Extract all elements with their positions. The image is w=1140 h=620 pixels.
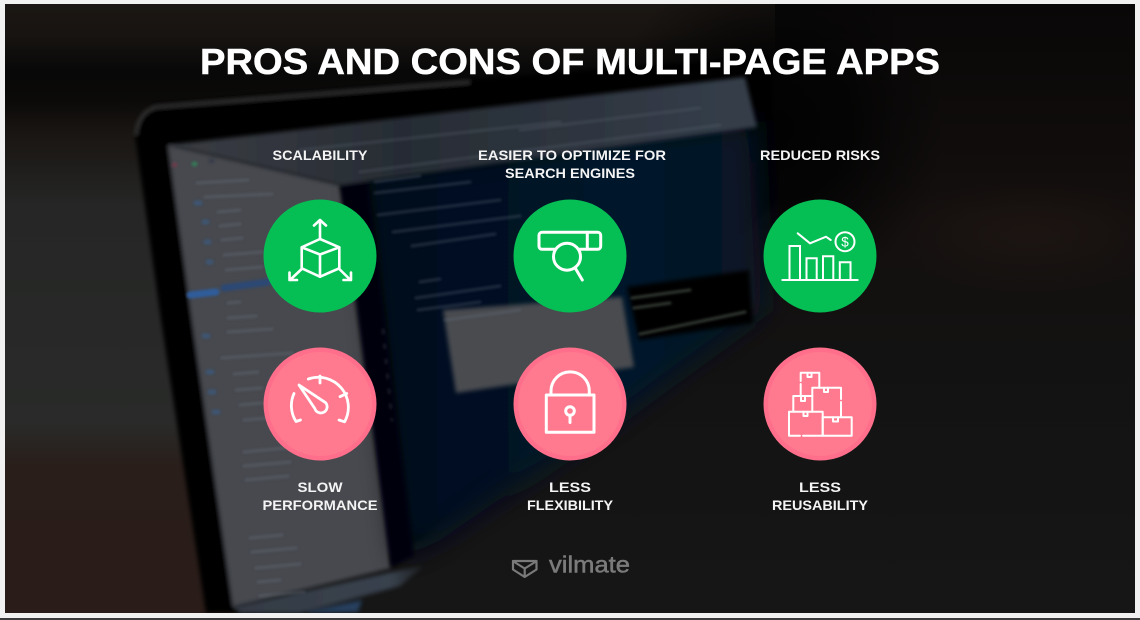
label: less flexibility: LESS [549, 479, 591, 495]
pink circle [264, 348, 376, 460]
logo: vilmate [513, 552, 630, 578]
dialog box [443, 297, 634, 393]
pink circle [764, 348, 876, 460]
label: less flexibility [527, 479, 614, 513]
label: slow performance [262, 479, 378, 513]
icon: cube with arrows [290, 220, 351, 280]
icon: vilmate shield [513, 561, 536, 577]
label: slow performance: SLOW [298, 479, 343, 495]
green circle [764, 200, 876, 312]
label: reduced risks: REDUCED RISKS [760, 147, 880, 163]
icon: padlock [546, 372, 594, 432]
label: easier to optimize: EASIER TO OPTIMIZE FOR [478, 147, 666, 163]
laptop base [233, 565, 425, 613]
column 3 con: less reusability [764, 348, 876, 513]
label: less reusability: REUSABILITY [772, 497, 869, 513]
column 1 pro: scalability [264, 147, 376, 312]
icon: bar chart with dollar coin [782, 232, 858, 280]
icon: speedometer [291, 376, 348, 422]
sidebar pane [168, 145, 391, 607]
label: easier to optimize: SEARCH ENGINES [505, 165, 635, 181]
icon: stacked boxes [789, 373, 852, 436]
label: slow performance: PERFORMANCE [262, 497, 378, 513]
green circle [264, 200, 376, 312]
editor gutter [340, 181, 414, 568]
label: easier to optimize [478, 147, 666, 181]
title: PROS AND CONS OF MULTI-PAGE APPS [200, 41, 940, 82]
label: scalability: SCALABILITY [272, 147, 368, 163]
label: less reusability: LESS [799, 479, 841, 495]
laptop bezel [134, 70, 651, 613]
label: less reusability [772, 479, 869, 513]
column 2 pro: search engines [478, 147, 666, 312]
column 3 pro: reduced risks [760, 147, 880, 312]
terminal box [627, 270, 753, 340]
icon: dollar sign: $ [841, 234, 849, 250]
icon: search bar with magnifier [539, 232, 601, 280]
pink circle [514, 348, 626, 460]
window toolbar [168, 77, 757, 185]
label: less flexibility: FLEXIBILITY [527, 497, 614, 513]
code editor [360, 120, 765, 560]
logo wordmark: vilmate [549, 552, 630, 578]
green circle [514, 200, 626, 312]
column 2 con: less flexibility [514, 348, 626, 513]
bottom screenshot strip [0, 618, 1140, 620]
column 1 con: slow performance [262, 348, 378, 513]
